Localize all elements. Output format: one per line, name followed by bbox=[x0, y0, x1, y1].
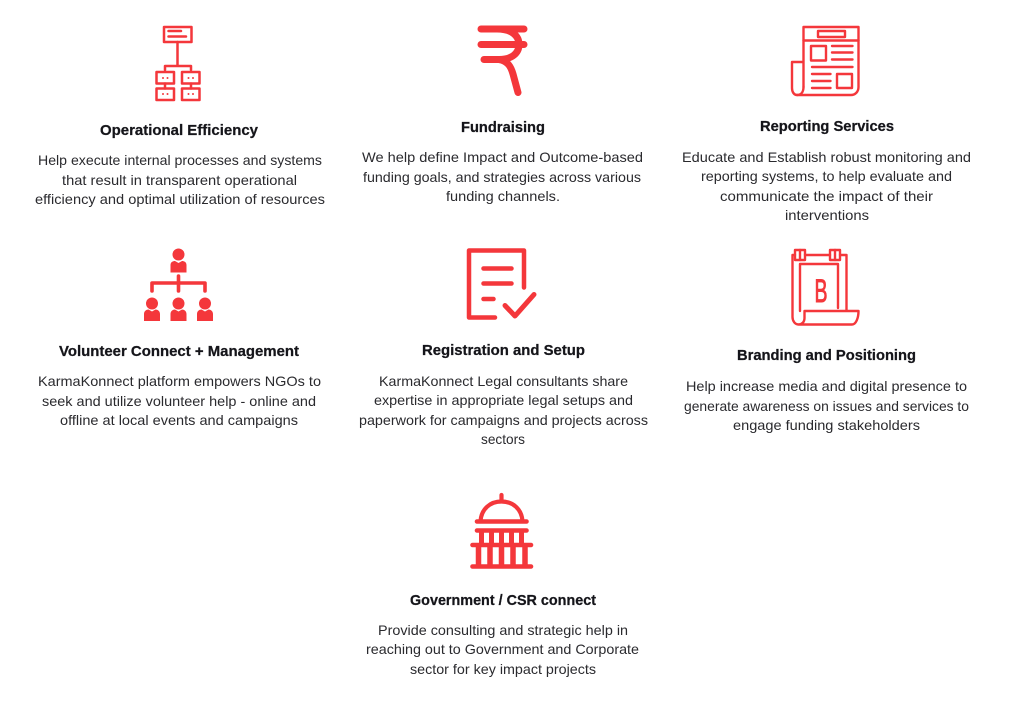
text block: communicate the impact of their bbox=[720, 188, 933, 204]
text block: Provide consulting and strategic help in bbox=[378, 622, 628, 638]
text block: offline at local events and campaigns bbox=[60, 412, 298, 428]
heading: Operational Efficiency bbox=[100, 122, 259, 139]
icon letter: B bbox=[814, 273, 828, 309]
text block: Help execute internal processes and systems bbox=[38, 152, 322, 168]
text block: sector for key impact projects bbox=[410, 661, 596, 677]
text block: We help define Impact and Outcome-based bbox=[362, 149, 643, 165]
heading: Registration and Setup bbox=[422, 342, 585, 359]
panel: Branding and Positioning bbox=[684, 250, 969, 433]
icon: capitol dome bbox=[472, 495, 531, 566]
text block bbox=[362, 149, 643, 204]
heading: Reporting Services bbox=[760, 118, 894, 135]
text block: funding channels. bbox=[446, 188, 560, 204]
icon: flow chart bbox=[156, 27, 200, 100]
text block: Educate and Establish robust monitoring and bbox=[682, 149, 971, 165]
panel: Registration and Setup bbox=[359, 250, 648, 447]
text block: KarmaKonnect Legal consultants share bbox=[379, 373, 628, 389]
heading: Fundraising bbox=[461, 119, 545, 136]
panel: Government / CSR connect bbox=[366, 495, 639, 677]
text block: KarmaKonnect platform empowers NGOs to bbox=[38, 373, 321, 389]
text block: interventions bbox=[785, 207, 869, 223]
text block: sectors bbox=[481, 431, 525, 447]
text block: paperwork for campaigns and projects across bbox=[359, 412, 648, 428]
text block: expertise in appropriate legal setups and bbox=[374, 392, 633, 408]
panel: Fundraising bbox=[362, 29, 643, 204]
text block bbox=[359, 373, 648, 447]
text block: efficiency and optimal utilization of resources bbox=[35, 191, 325, 207]
text block bbox=[684, 378, 969, 433]
heading: Government / CSR connect bbox=[410, 592, 596, 609]
text block: reaching out to Government and Corporate bbox=[366, 641, 639, 657]
text block bbox=[366, 622, 639, 677]
text block: funding goals, and strategies across various bbox=[363, 169, 641, 185]
icon: newspaper bbox=[792, 27, 858, 95]
heading: Branding and Positioning bbox=[737, 347, 916, 364]
text block: seek and utilize volunteer help - online and bbox=[42, 393, 316, 409]
text block: that result in transparent operational bbox=[62, 172, 297, 188]
text block: generate awareness on issues and services to bbox=[684, 398, 969, 414]
text block: engage funding stakeholders bbox=[733, 417, 920, 433]
text block: Help increase media and digital presence to bbox=[686, 378, 967, 394]
icon: rupee bbox=[481, 29, 524, 92]
panel: Volunteer Connect + Management bbox=[38, 248, 321, 428]
icon: checklist document bbox=[469, 250, 534, 318]
panel: Operational Efficiency bbox=[35, 27, 325, 207]
icon: people hierarchy bbox=[144, 248, 213, 321]
icon: branding calendar bbox=[792, 250, 858, 324]
text block bbox=[35, 152, 325, 207]
heading: Volunteer Connect + Management bbox=[59, 343, 299, 360]
text block bbox=[38, 373, 321, 428]
text block: reporting systems, to help evaluate and bbox=[701, 168, 952, 184]
panel: Reporting Services bbox=[682, 27, 971, 223]
text block bbox=[682, 149, 971, 223]
